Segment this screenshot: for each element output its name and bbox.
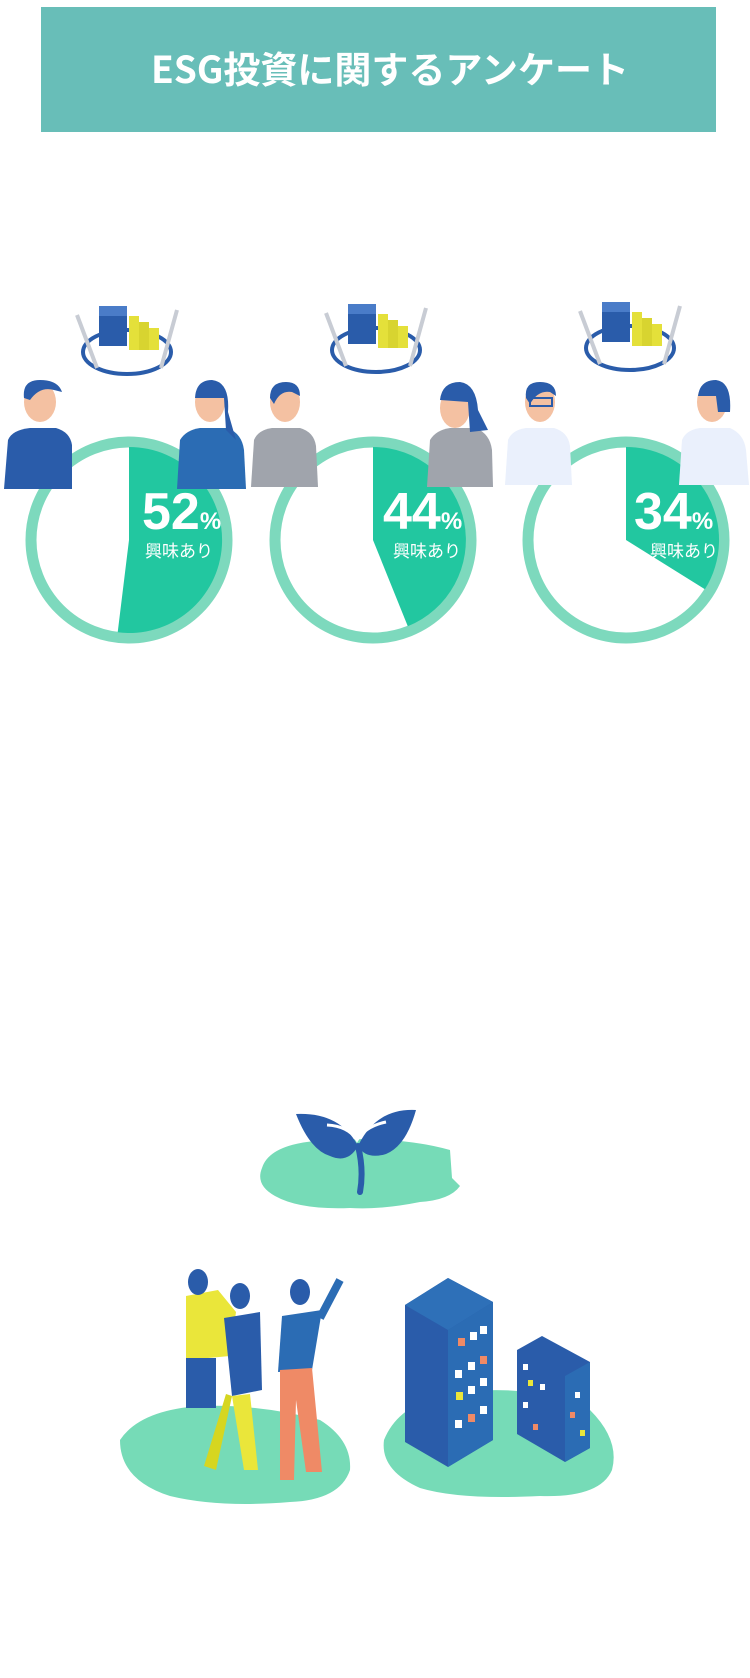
pie chart: 44%: 44%: [383, 483, 462, 541]
title banner: ESG投資に関するアンケート: [151, 40, 629, 94]
icon: dish with money 3: [580, 302, 680, 370]
illustration: sprout: [260, 1110, 460, 1208]
pie chart: 34%: 興味あり: [650, 537, 718, 562]
illustration: people celebrating: [120, 1269, 350, 1504]
icon: dish with money 2: [326, 304, 426, 372]
pie chart: 34%: [528, 442, 724, 638]
pie chart: 52%: 52%: [142, 483, 221, 541]
pie chart: 52%: [31, 442, 227, 638]
person 3: [251, 382, 318, 487]
icon: dish with money 1: [77, 306, 177, 374]
person 2: [177, 380, 246, 489]
person 6: [679, 380, 749, 485]
person 5: [505, 382, 572, 485]
pie chart: 44%: 興味あり: [393, 537, 461, 562]
pie chart: 44%: [275, 442, 471, 638]
pie chart: 34%: 34%: [634, 483, 713, 541]
illustration: buildings: [384, 1278, 614, 1497]
person 4: [427, 382, 493, 487]
title banner: [41, 7, 716, 132]
pie chart: 52%: 興味あり: [145, 537, 213, 562]
person 1: [4, 380, 72, 489]
